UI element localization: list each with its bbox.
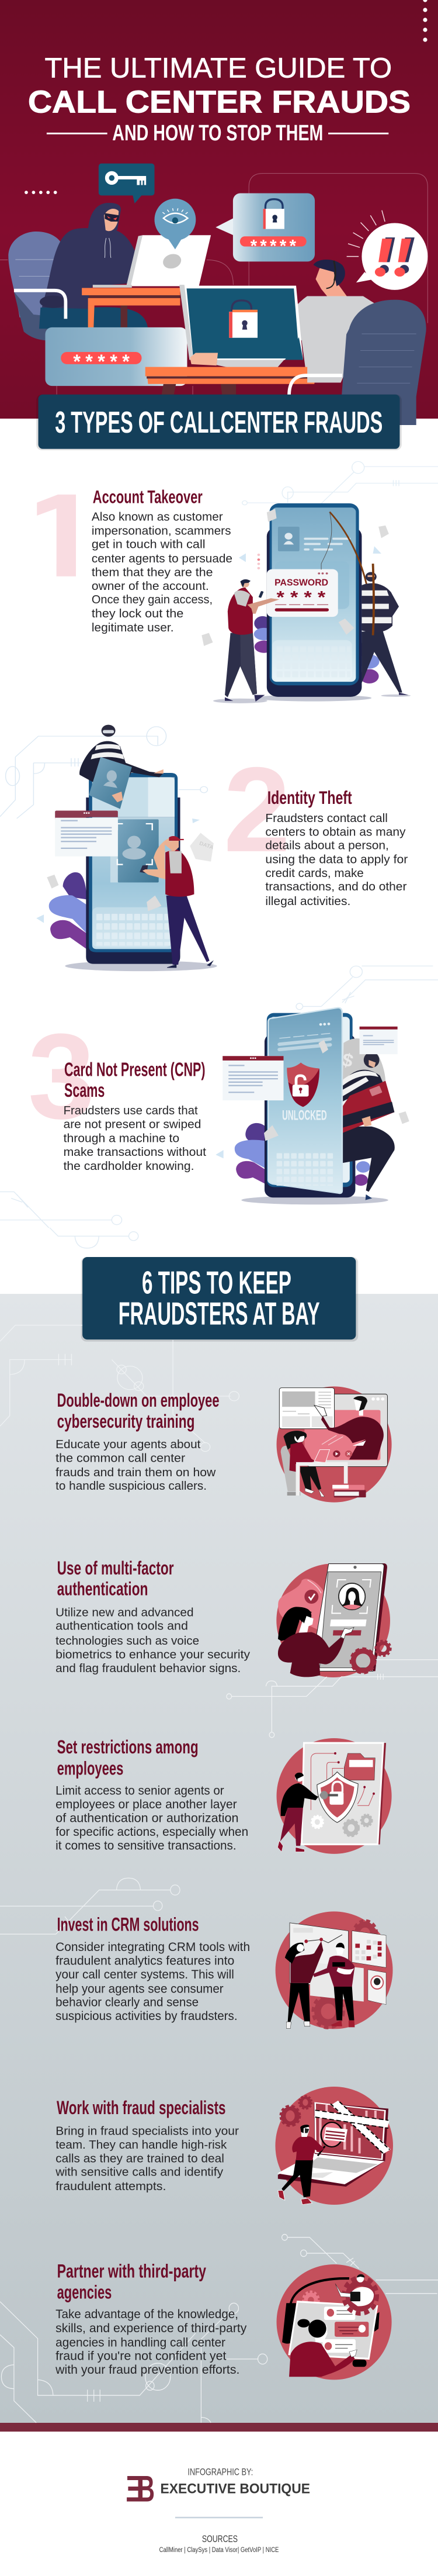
number 3: 3: [28, 1008, 95, 1144]
call center agent figure: [217, 260, 374, 382]
body text: legitimate user.: [92, 621, 174, 634]
title: [28, 53, 411, 145]
body text: are not present or swiped: [64, 1117, 201, 1131]
body text: [55, 2125, 239, 2193]
body text: owner of the account.: [92, 579, 209, 593]
right chair: [289, 300, 426, 425]
password asterisks: ****: [277, 588, 326, 607]
heading: agencies: [57, 2282, 112, 2303]
sources list: CallMiner | ClaySys | Data Visor| GetVoIP | NICE: [159, 2545, 279, 2554]
hero illustration: hacker and call center agent: [0, 164, 427, 425]
body text: [55, 1941, 250, 2023]
thief with credit card: [342, 1052, 395, 1200]
sources heading: SOURCES: [202, 2534, 238, 2544]
body text: fraudulent analytics features into: [55, 1955, 234, 1968]
body text: employees or place another layer: [55, 1798, 237, 1811]
body text: and flag fraudulent behavior signs.: [55, 1661, 241, 1675]
body text: through a machine to: [64, 1131, 179, 1145]
body text: fraud if you're not confident yet: [55, 2350, 227, 2363]
tip 2 text: [55, 1558, 250, 1675]
infographic by label: INFOGRAPHIC BY:: [187, 2467, 253, 2477]
icon: access restrictions illustration: [277, 1738, 392, 1854]
circuit lines behind tip 1: [0, 1325, 239, 1452]
decorative dots top right: [423, 0, 427, 42]
body text: with sensitive calls and identify: [55, 2166, 223, 2179]
money bag: $: [339, 1049, 356, 1071]
circuit lines near tip 6: [0, 2235, 438, 2423]
body text: help your agents see consumer: [55, 1983, 224, 1996]
document card: [55, 818, 118, 857]
body text: the common call center: [55, 1451, 185, 1465]
icon: fraud specialist illustration: [275, 2087, 393, 2205]
body text: Utilize new and advanced: [55, 1605, 193, 1619]
body text: centers to obtain as many: [265, 825, 406, 838]
body text: [64, 1103, 206, 1173]
icon: lock speech bubble with password: [215, 194, 315, 261]
woman: [278, 1607, 311, 1641]
heading: Double-down on employee: [57, 1390, 219, 1411]
logo mark: [126, 2468, 155, 2509]
body text: Limit access to senior agents or: [55, 1784, 224, 1798]
body text: calls as they are trained to deal: [55, 2152, 224, 2165]
body text: Educate your agents about: [55, 1438, 201, 1451]
man: [334, 1986, 354, 2021]
document card left: [223, 1056, 283, 1100]
heading: Set restrictions among: [57, 1736, 199, 1757]
panel: tips section background: [0, 1294, 438, 2423]
password asterisks: *****: [73, 350, 130, 372]
heading: Account Takeover: [93, 487, 203, 507]
heading: Use of multi-factor: [57, 1558, 174, 1579]
heading: [57, 1736, 199, 1779]
left chair: [8, 232, 75, 340]
tip 3 text: [55, 1736, 248, 1852]
body text: suspicious activities by fraudsters.: [55, 2010, 238, 2023]
tip 6 text: [55, 2261, 247, 2377]
body text: technologies such as voice: [55, 1634, 199, 1648]
body text: Take advantage of the knowledge,: [55, 2308, 238, 2321]
left desk and laptop: [82, 235, 211, 329]
phone glass panel: [268, 1008, 342, 1193]
company name: EXECUTIVE BOUTIQUE: [161, 2481, 310, 2496]
icon: multi-factor authentication illustration: [276, 1563, 391, 1677]
heading: [57, 1390, 219, 1432]
title line 1: THE ULTIMATE GUIDE TO: [45, 53, 392, 84]
icon: CRM illustration: [276, 1911, 393, 2029]
document card right: [360, 1027, 398, 1054]
body text: Consider integrating CRM tools with: [55, 1941, 250, 1954]
tip 4 text: [55, 1914, 250, 2023]
heading: cybersecurity training: [57, 1411, 194, 1432]
icon: alert exclamation bubble: [347, 210, 427, 290]
body text: to handle suspicious callers.: [55, 1479, 207, 1493]
body text: of authentication or authorization: [55, 1812, 238, 1825]
body text: impersonation, scammers: [92, 524, 231, 537]
heading: [57, 1558, 174, 1600]
heading: Scams: [64, 1080, 105, 1101]
body text: transactions, and do other: [265, 880, 406, 893]
hacker figure: [39, 203, 148, 329]
woman: [289, 2342, 354, 2377]
number 1: 1: [10, 469, 121, 602]
body text: Once they gain access,: [92, 593, 213, 606]
unlocked label: UNLOCKED: [282, 1107, 327, 1123]
circuit lines above tips banner: [50, 1228, 138, 1248]
section banner: 3 types: [36, 395, 402, 450]
heading: Work with fraud specialists: [57, 2097, 226, 2118]
data label: DATA: [199, 840, 214, 851]
body text: Bring in fraud specialists into your: [55, 2125, 239, 2138]
tip 1 text: [55, 1390, 219, 1493]
heading: [64, 1059, 206, 1101]
password panel: [45, 327, 187, 386]
body text: using the data to apply for: [265, 852, 408, 866]
right desk: [145, 340, 341, 395]
body text: get in touch with call: [92, 537, 206, 551]
body text: fraudulent attempts.: [55, 2180, 166, 2193]
title line 3: AND HOW TO STOP THEM: [112, 120, 323, 145]
fraud type 2: identity theft text: [224, 743, 408, 908]
upper part: thief: [0, 725, 207, 820]
woman at laptop: [281, 1446, 296, 1491]
icon: unlocked shield: [287, 1062, 319, 1107]
body text: with your fraud prevention efforts.: [55, 2363, 239, 2377]
icon: key speech bubble: [99, 164, 155, 203]
gears: [351, 1641, 391, 1673]
heading: employees: [57, 1758, 123, 1779]
body text: skills, and experience of third-party: [55, 2322, 247, 2335]
body text: Fraudsters use cards that: [64, 1103, 198, 1117]
body text: it comes to sensitive transactions.: [55, 1839, 237, 1852]
body text: for specific actions, especially when: [55, 1825, 248, 1839]
number 2: 2: [224, 743, 290, 877]
body text: they lock out the: [92, 607, 183, 620]
body text: Fraudsters contact call: [265, 811, 388, 825]
illustration: identity theft phone: [0, 725, 217, 971]
man with key: [280, 1807, 303, 1846]
heading: Invest in CRM solutions: [57, 1914, 199, 1935]
banner heading: [119, 1265, 320, 1331]
monitor with lock: [179, 285, 303, 360]
heading: Identity Theft: [267, 788, 352, 808]
body text: [55, 2308, 247, 2377]
body text: illegal activities.: [265, 894, 350, 908]
body text: [55, 1605, 250, 1675]
body text: make transactions without: [64, 1145, 206, 1159]
footer credit: [126, 2467, 310, 2554]
heading: authentication: [57, 1579, 148, 1600]
heading: Partner with third-party: [57, 2261, 206, 2282]
illustration: phishing phone with password: [201, 461, 438, 703]
body text: biometrics to enhance your security: [55, 1648, 250, 1661]
password label: PASSWORD: [274, 578, 328, 588]
money bag: [339, 1038, 385, 1106]
woman: [288, 1983, 310, 2022]
body text: details about a person,: [265, 838, 389, 852]
body text: center agents to persuade: [92, 552, 232, 565]
body text: team. They can handle high-risk: [55, 2138, 227, 2152]
footer stripe: [0, 2423, 438, 2432]
icon: training illustration: [277, 1386, 392, 1503]
body text: [265, 811, 408, 908]
illustration: unlocked phone with card thief: [0, 966, 438, 1228]
man with phone: [225, 579, 279, 702]
body text: your call center systems. This will: [55, 1969, 234, 1981]
circuit lines near tip 4: [0, 1878, 180, 1934]
body text: [92, 510, 232, 634]
panel: header background: [0, 0, 438, 419]
logo mark: B: [137, 2468, 155, 2509]
circuit lines near tip 3: [227, 1660, 438, 1738]
thief with fishing rod: [361, 564, 408, 695]
man: [166, 896, 210, 965]
fraud type 3: card not present text: [28, 1008, 206, 1173]
man presenter: [321, 1415, 384, 1459]
section banner: 6 tips: [81, 1257, 358, 1342]
title line 2: CALL CENTER FRAUDS: [28, 85, 411, 120]
password card: [267, 569, 338, 617]
heading: [57, 2261, 206, 2303]
password asterisks: *****: [251, 236, 296, 255]
body text: Also known as customer: [92, 510, 223, 523]
tip 5 text: [55, 2097, 239, 2193]
banner heading: 6 TIPS TO KEEP: [142, 1265, 291, 1300]
body text: authentication tools and: [55, 1619, 188, 1632]
body text: the cardholder knowing.: [64, 1159, 194, 1173]
lower part: phone and man: [36, 817, 217, 971]
body text: them that they are the: [92, 565, 213, 579]
fraud type 1: account takeover text: [37, 490, 232, 634]
heading: Card Not Present (CNP): [64, 1059, 206, 1080]
body text: frauds and train them on how: [55, 1466, 216, 1479]
man: [281, 2159, 313, 2197]
body text: [55, 1784, 248, 1852]
icon: third-party agencies illustration: [277, 2264, 392, 2380]
gear and helper: [343, 2278, 377, 2313]
body text: behavior clearly and sense: [55, 1996, 199, 2009]
body text: agencies in handling call center: [55, 2336, 225, 2349]
body text: [55, 1438, 216, 1493]
body text: credit cards, make: [265, 866, 364, 880]
logo mark: E: [126, 2468, 144, 2509]
icon: eye speech bubble: [155, 199, 196, 250]
